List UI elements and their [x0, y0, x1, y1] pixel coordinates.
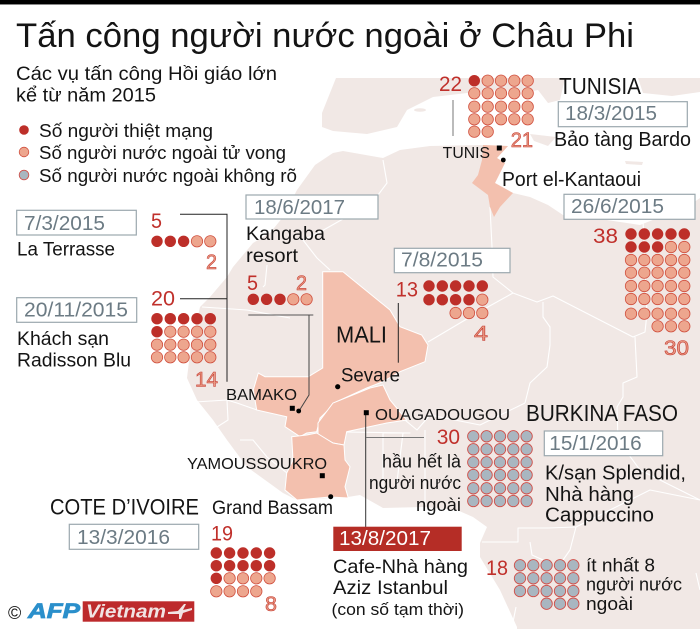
- panel: Radisson Blu 20/11/2015: [17, 288, 218, 392]
- panel: Burkina Faso Splendid 15/1/2016: K/sạn Splendid,: [545, 462, 686, 484]
- panel: Aziz Istanbul 13/8/2017: 18: [486, 557, 508, 580]
- panel: Port el-Kantaoui 26/6/2015: Port el-Kantaoui: [502, 169, 641, 191]
- panel: Cote d'Ivoire Grand Bassam 13/3/2016: [50, 494, 333, 616]
- panel: Burkina Faso Splendid 15/1/2016: hầu hết là: [382, 451, 462, 471]
- dots: Sevare: [423, 280, 488, 319]
- panel: Radisson Blu 20/11/2015: 14: [195, 369, 218, 392]
- panel: Cote d'Ivoire Grand Bassam 13/3/2016: 19: [211, 523, 233, 546]
- connector line: Tunis: [452, 100, 454, 136]
- panel: Burkina Faso Splendid 15/1/2016: ngoài: [416, 495, 461, 515]
- subtitle: [16, 64, 277, 107]
- map labels and city markers: TUNIS: [443, 145, 490, 162]
- map labels and city markers: YAMOUSSOUKRO: [187, 456, 327, 473]
- connector line: Kangaba to map: [299, 315, 309, 411]
- highlighted country: Mali: [253, 272, 428, 437]
- panel: Aziz Istanbul 13/8/2017: ít nhất 8: [586, 556, 655, 576]
- panel: Aziz Istanbul 13/8/2017: 13/8/2017: [339, 528, 431, 550]
- panel: Cote d'Ivoire Grand Bassam 13/3/2016: Grand Bassam: [212, 498, 333, 519]
- panel: Cote d'Ivoire Grand Bassam 13/3/2016: COTE D’IVOIRE: [50, 494, 199, 519]
- legend: Số người nước ngoài không rõ: [39, 166, 297, 186]
- panel: Radisson Blu 20/11/2015: Khách sạn: [17, 329, 109, 350]
- dots: Kangaba: [248, 294, 312, 305]
- panel: Radisson Blu 20/11/2015: 20: [151, 288, 175, 311]
- panel: Aziz Istanbul 13/8/2017: ngoài: [586, 594, 633, 614]
- connector line: Ouagadougou: [366, 415, 424, 527]
- panel: Radisson Blu 20/11/2015: 20/11/2015: [24, 300, 128, 322]
- panel: Burkina Faso Splendid 15/1/2016: người nước: [369, 473, 461, 493]
- logo: copyright AFP Vietnam: Vietnam: [86, 602, 166, 622]
- panel: Aziz Istanbul 13/8/2017: Cafe-Nhà hàng: [333, 556, 468, 578]
- panel: Kangaba resort 18/6/2017: resort: [246, 246, 299, 267]
- top black bar: [0, 0, 700, 5]
- panel: Tunisia Bardo 18/3/2015: TUNISIA: [559, 73, 642, 99]
- connector lines: Bamako attacks: [180, 214, 227, 382]
- dots: Grand Bassam: [211, 547, 275, 597]
- panel: Port el-Kantaoui 26/6/2015: 38: [593, 225, 618, 248]
- panel: La Terrasse 7/3/2015: 2: [206, 251, 217, 274]
- map labels and city markers: BAMAKO: [226, 387, 297, 404]
- dots: Aziz Istanbul: [514, 560, 579, 609]
- panel: Port el-Kantaoui 26/6/2015: [502, 169, 695, 360]
- logo: copyright AFP Vietnam: AFP: [27, 600, 81, 623]
- title: Tấn công người nước ngoài ở Châu Phi: [16, 17, 634, 55]
- panel: Burkina Faso Splendid 15/1/2016: BURKINA FASO: [526, 400, 678, 426]
- panel: Burkina Faso Splendid 15/1/2016: Nhà hàng: [545, 484, 634, 506]
- panel: Kangaba resort 18/6/2017: 18/6/2017: [254, 197, 345, 219]
- panel: Sevare 7/8/2015: 4: [474, 323, 488, 346]
- panel: Port el-Kantaoui 26/6/2015: 30: [664, 337, 689, 360]
- map labels and city markers: OUAGADOUGOU: [375, 407, 510, 424]
- panel: Cote d'Ivoire Grand Bassam 13/3/2016: 8: [265, 593, 277, 616]
- panel: Radisson Blu 20/11/2015: Radisson Blu: [17, 351, 131, 372]
- panel: Kangaba resort 18/6/2017: [246, 195, 378, 305]
- base map of North and West Africa: [187, 78, 700, 629]
- highlighted country: Tunisia: [472, 145, 513, 217]
- dots: Radisson Blu: [151, 313, 216, 363]
- panel: Aziz Istanbul 13/8/2017: Aziz Istanbul: [333, 577, 448, 599]
- panel: Burkina Faso Splendid 15/1/2016: 15/1/2016: [549, 433, 642, 455]
- panel: Tunisia Bardo 18/3/2015: Bảo tàng Bardo: [554, 129, 691, 151]
- panel: Cote d'Ivoire Grand Bassam 13/3/2016: 13/3/2016: [77, 527, 170, 549]
- subtitle: Các vụ tấn công Hồi giáo lớn: [16, 64, 277, 85]
- panel: Kangaba resort 18/6/2017: 2: [296, 272, 307, 295]
- highlighted country: Cote d'Ivoire: [285, 433, 350, 500]
- panel: La Terrasse 7/3/2015: 7/3/2015: [24, 213, 105, 235]
- panel: La Terrasse 7/3/2015: 5: [151, 210, 162, 233]
- highlighted country: Burkina Faso: [318, 385, 407, 445]
- panel: Burkina Faso Splendid 15/1/2016: 30: [437, 426, 460, 449]
- dots: Port el-Kantaoui: [625, 228, 690, 332]
- panel: Tunisia Bardo 18/3/2015: [439, 73, 691, 152]
- map labels and city markers: Sevare: [341, 366, 400, 387]
- dots: Bardo: [469, 75, 533, 137]
- panel: Aziz Istanbul 13/8/2017: người nước: [586, 575, 682, 595]
- panel: Tunisia Bardo 18/3/2015: 18/3/2015: [565, 103, 657, 125]
- panel: Tunisia Bardo 18/3/2015: 21: [511, 129, 533, 152]
- panel: La Terrasse 7/3/2015: La Terrasse: [17, 240, 115, 261]
- dots: Splendid: [468, 431, 532, 507]
- map labels and city markers: [187, 145, 510, 499]
- panel: Burkina Faso Splendid 15/1/2016: [369, 400, 686, 527]
- legend: Số người thiệt mạng: [39, 121, 213, 141]
- panel: Burkina Faso Splendid 15/1/2016: Cappuccino: [545, 505, 654, 527]
- connector line: Kangaba: [248, 314, 313, 316]
- connector line: Sevare: [397, 303, 399, 363]
- logo: copyright AFP Vietnam: ©: [8, 603, 21, 623]
- map labels and city markers: MALI: [336, 322, 387, 348]
- panel: Kangaba resort 18/6/2017: Kangaba: [246, 224, 325, 245]
- legend: Số người nước ngoài tử vong: [39, 143, 286, 163]
- panel: La Terrasse 7/3/2015: [17, 210, 217, 274]
- panel: Kangaba resort 18/6/2017: 5: [247, 272, 258, 295]
- panel: Sevare 7/8/2015: 13: [396, 279, 418, 302]
- panel: Aziz Istanbul 13/8/2017: (con số tạm thời): [332, 600, 464, 619]
- panel: Port el-Kantaoui 26/6/2015: 26/6/2015: [571, 196, 664, 218]
- panel: Sevare 7/8/2015: 7/8/2015: [401, 250, 483, 272]
- logo: copyright AFP Vietnam: [8, 600, 194, 623]
- subtitle: kể từ năm 2015: [16, 86, 156, 107]
- panel: Sevare 7/8/2015: [394, 248, 510, 346]
- dots: La Terrasse: [151, 236, 216, 247]
- legend: [19, 121, 297, 186]
- panel: Aziz Istanbul 13/8/2017: [332, 527, 682, 619]
- panel: Tunisia Bardo 18/3/2015: 22: [439, 73, 462, 96]
